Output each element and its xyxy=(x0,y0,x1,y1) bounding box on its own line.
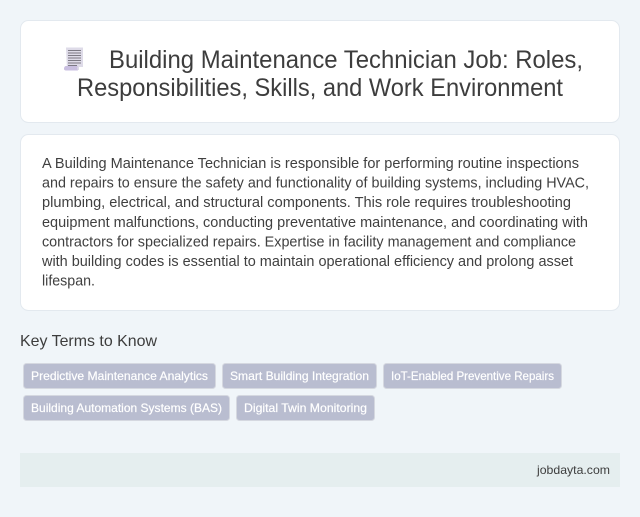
heading: key terms: Key Terms to Know xyxy=(20,333,157,350)
tag: Building Automation Systems (BAS) xyxy=(24,396,230,420)
header panel xyxy=(20,20,620,122)
tag: Digital Twin Monitoring xyxy=(236,396,374,420)
title: Responsibilities, Skills, and Work Environment xyxy=(77,74,563,102)
tag: IoT-Enabled Preventive Repairs xyxy=(384,364,562,388)
description text: with building codes is essential to maintain operational efficiency and prolong asset xyxy=(41,254,573,270)
description text: lifespan. xyxy=(42,274,95,290)
tag: Digital Twin Monitoring: Digital Twin Monitoring xyxy=(244,401,367,415)
description text: equipment malfunctions, conducting preventative maintenance, and coordinating with xyxy=(42,215,588,231)
title: Building Maintenance Technician Job: Roles, xyxy=(109,46,583,74)
description panel xyxy=(20,134,620,310)
footer bar xyxy=(20,453,620,487)
tag: Smart Building Integration xyxy=(222,364,376,388)
footer source text: jobdayta.com xyxy=(536,463,610,477)
title xyxy=(77,46,583,102)
tag: Predictive Maintenance Analytics: Predictive Maintenance Analytics xyxy=(31,369,208,383)
description text: A Building Maintenance Technician is responsible for performing routine inspections xyxy=(42,156,579,172)
tag: Predictive Maintenance Analytics xyxy=(24,364,216,388)
description text xyxy=(41,156,589,290)
description text: contractors for specialized repairs. Expertise in facility management and compliance xyxy=(42,234,576,250)
description text: and repairs to ensure the safety and functionality of building systems, including HVAC, xyxy=(42,176,589,192)
tag: Building Automation Systems (BAS): Building Automation Systems (BAS) xyxy=(31,401,222,415)
tag: IoT-Enabled Preventive Repairs: IoT-Enabled Preventive Repairs xyxy=(391,369,554,383)
icon: document scroll xyxy=(64,48,83,70)
description text: plumbing, electrical, and structural components. This role requires troubleshooting xyxy=(42,195,571,211)
tag: Smart Building Integration: Smart Building Integration xyxy=(230,369,369,383)
